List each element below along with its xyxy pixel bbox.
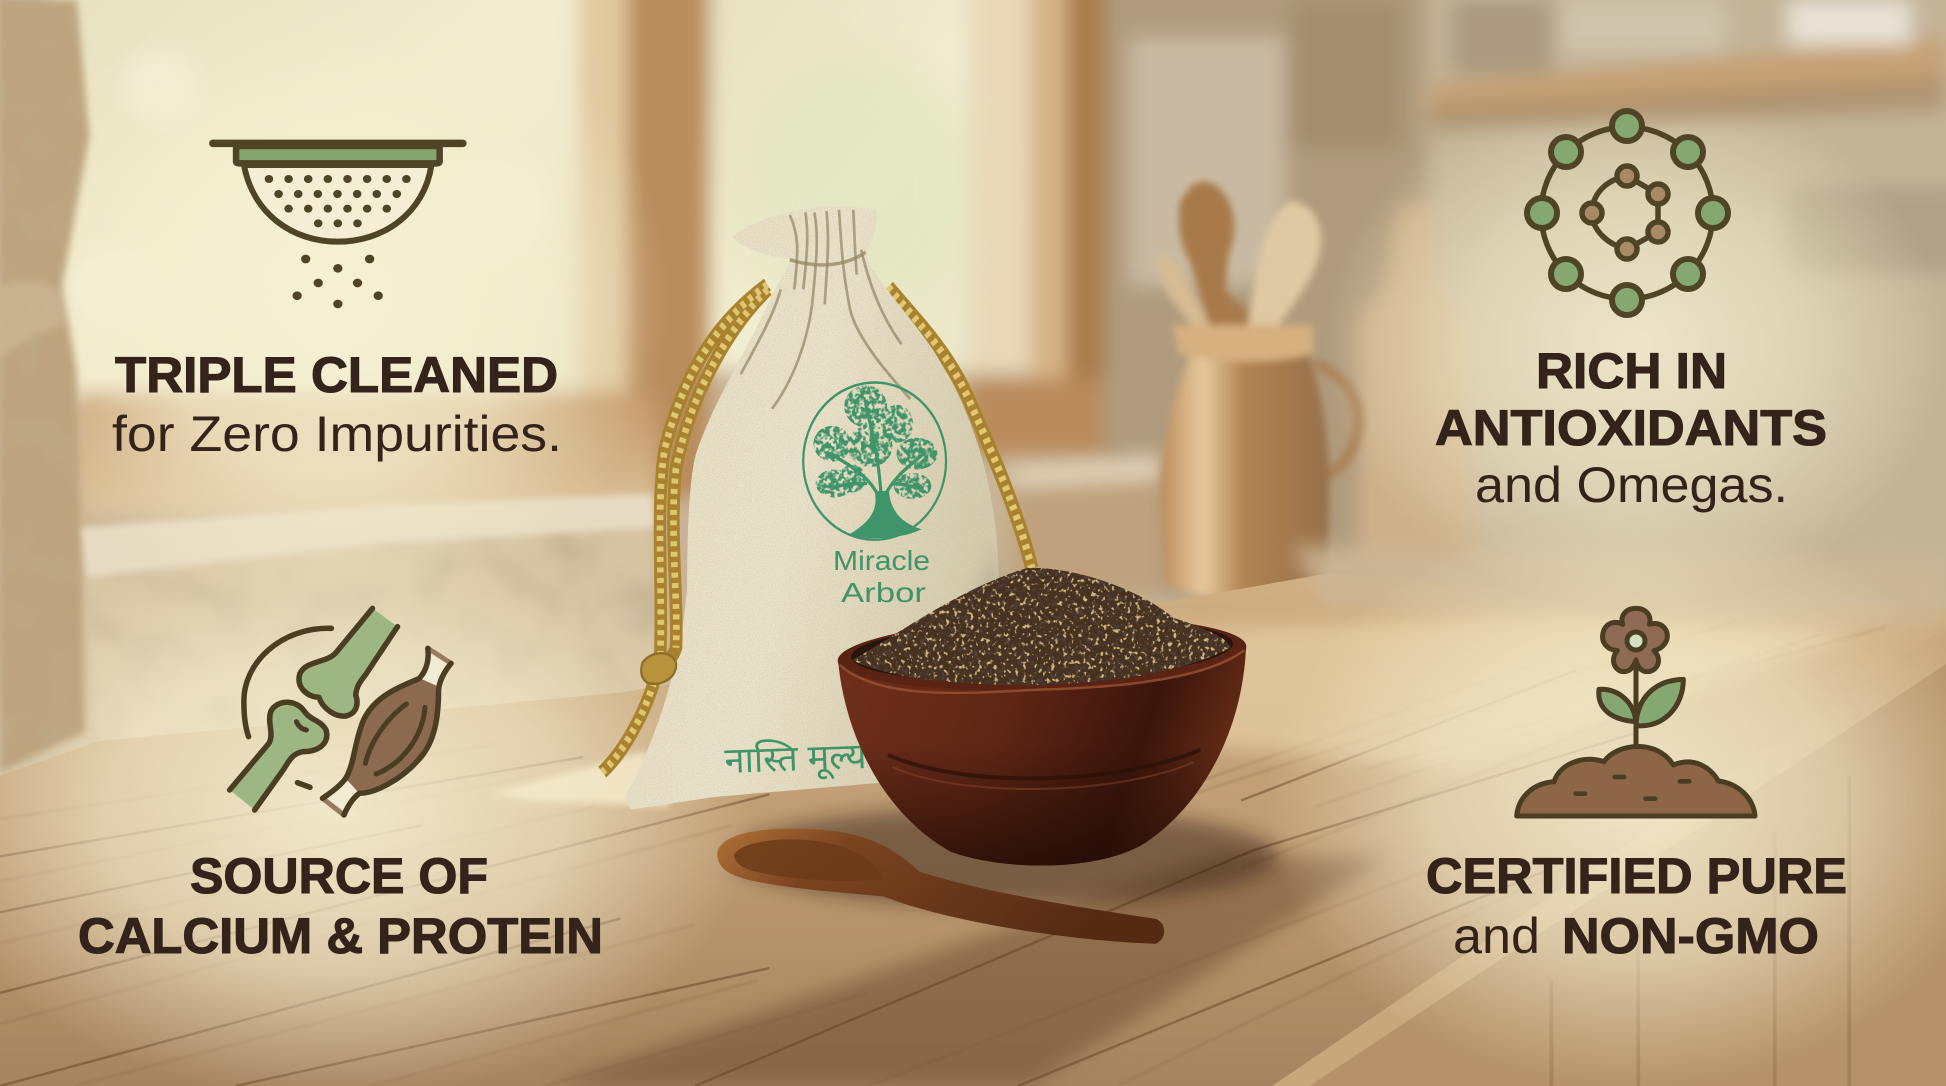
rope behind bag right bbox=[888, 287, 1032, 568]
stone column and shelf in front of glow bbox=[0, 0, 1946, 772]
feature: source of calcium and protein bbox=[78, 608, 603, 964]
heading: RICH IN bbox=[1536, 343, 1727, 399]
bag brand text: Miracle bbox=[833, 545, 930, 576]
icon: flower growing from soil bbox=[1517, 608, 1755, 816]
heading: TRIPLE CLEANED bbox=[115, 347, 558, 403]
wooden spoon bbox=[717, 829, 1164, 944]
heading: SOURCE OF bbox=[190, 848, 488, 904]
feature: triple cleaned bbox=[112, 143, 562, 462]
bag brand text bbox=[724, 545, 930, 783]
heading bbox=[1435, 343, 1827, 456]
subheading: and Omegas. bbox=[1475, 457, 1788, 513]
subheading bbox=[1453, 908, 1819, 964]
stone and wood foreground bbox=[77, 494, 658, 751]
logo circle bbox=[803, 383, 946, 540]
heading: CALCIUM & PROTEIN bbox=[78, 908, 603, 964]
product: wooden bowl of sesame seeds bbox=[837, 568, 1247, 866]
subheading: and bbox=[1453, 908, 1540, 964]
icon: colander with falling grains bbox=[213, 143, 463, 308]
rope left bbox=[602, 285, 767, 772]
tree foliage bbox=[813, 386, 938, 499]
bag body bbox=[626, 206, 1002, 809]
icon: bone joint and muscle bbox=[230, 608, 451, 815]
product: drawstring bag bbox=[602, 206, 1032, 809]
subheading: NON-GMO bbox=[1562, 908, 1819, 964]
bag brand text: Arbor bbox=[841, 577, 926, 608]
subheading: for Zero Impurities. bbox=[112, 406, 562, 462]
feature: certified pure and non-gmo bbox=[1426, 608, 1847, 964]
heading bbox=[78, 848, 603, 964]
feature: rich in antioxidants bbox=[1435, 111, 1827, 513]
icon: molecule ring bbox=[1527, 111, 1728, 315]
bag brand text: नास्ति मूल्य bbox=[724, 735, 868, 783]
heading: ANTIOXIDANTS bbox=[1435, 400, 1827, 456]
heading: CERTIFIED PURE bbox=[1426, 848, 1847, 904]
